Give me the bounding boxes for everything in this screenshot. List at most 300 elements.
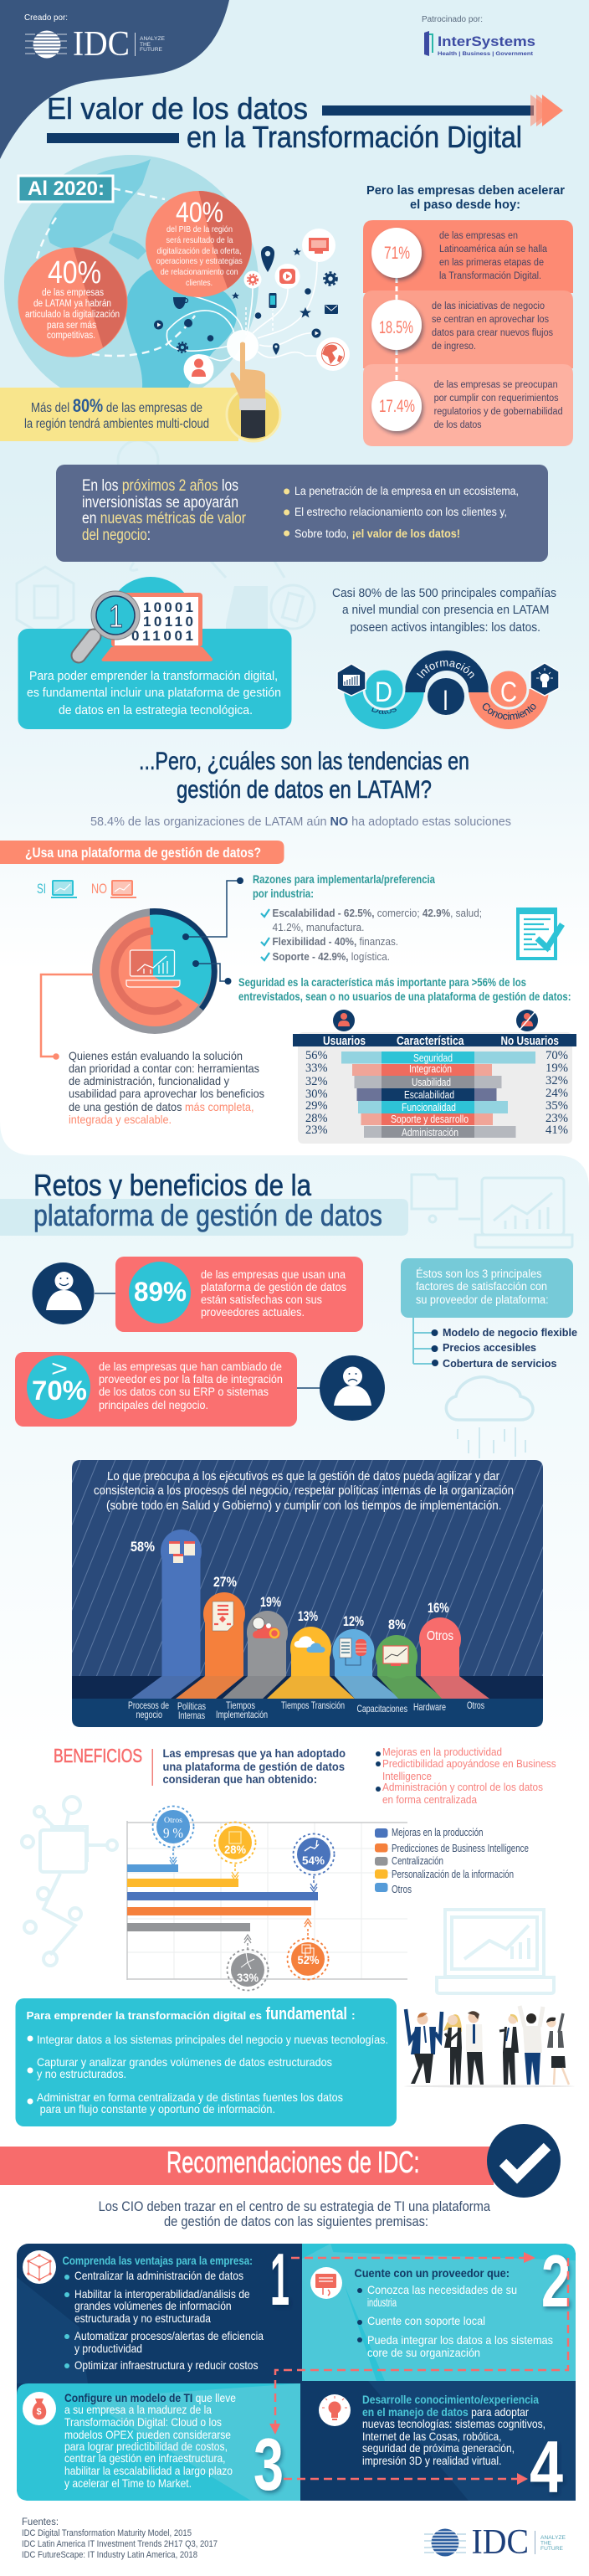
bar: transición: 13% <box>298 1608 318 1624</box>
network of icons <box>154 229 350 384</box>
text block: activos intangibles: Casi 80% de las 500 principales compañías <box>332 586 556 600</box>
callout: otros 9% <box>152 1807 194 1865</box>
quadrant 4: Desarrolle conocimiento/experiencia <box>362 2393 539 2406</box>
heading: tendencias: gestión de datos en LATAM? <box>177 776 432 804</box>
bubble: 40% LATAM: 40% <box>48 255 101 291</box>
icon: laptop with binary: 10110 <box>143 614 193 630</box>
table: características <box>293 1032 576 1144</box>
text block: quienes evalúan <box>69 1049 264 1126</box>
text block: activos intangibles: poseen activos intangibles: los datos. <box>350 620 540 635</box>
icon: check circle <box>487 2124 561 2198</box>
quadrant 3: habilitar la escalabilidad a largo plazo <box>64 2464 233 2477</box>
header blob with IDC logo: ANALYZE <box>140 37 165 42</box>
quadrant 3: y acelerar el Time to Market. <box>64 2476 192 2490</box>
quadrant 4: 4 <box>530 2425 563 2508</box>
stat: 18.5%: de ingreso. <box>432 342 476 352</box>
bar labels: Procesos de <box>128 1699 169 1711</box>
callout: otros 9%: 9 % <box>163 1825 183 1841</box>
diagram: datos información conocimiento: Datos <box>371 707 397 714</box>
panel: preocupaciones ejecutivos: Lo que preocupa a los ejecutivos es que la gestión de datos pueda agilizar y dar <box>107 1469 499 1483</box>
legend: beneficios: Centralización <box>392 1854 443 1867</box>
panel: 70%: de las empresas que han cambiado de <box>99 1360 282 1373</box>
letter C <box>489 670 528 708</box>
text block: razones: Escalabilidad - 62.5%, comercio; 42.9%, salud; <box>273 907 482 919</box>
panel: 89%: proveedores actuales. <box>201 1306 305 1319</box>
diagram: datos información conocimiento <box>336 650 560 729</box>
connector: evaluando <box>41 974 93 1060</box>
letter I <box>428 678 464 717</box>
heading: tendencias: ...Pero, ¿cuáles son las tendencias en <box>139 748 469 775</box>
arrow: step 3 to 4 <box>284 2473 528 2485</box>
text block: activos intangibles: a nivel mundial con presencia en LATAM <box>342 603 549 617</box>
heading: retos y beneficios: Retos y beneficios de la <box>33 1168 312 1202</box>
icon: magnifier: 1 <box>109 599 123 635</box>
quadrant 3: a su empresa a la madurez de la <box>64 2403 212 2416</box>
text block: seguridad <box>238 976 571 1003</box>
badge: Al 2020: Al 2020: <box>28 177 105 200</box>
panel: 89%: 89% <box>134 1277 187 1307</box>
quadrant 2: core de su organización <box>367 2346 480 2359</box>
panel: 89%: están satisfechas con sus <box>201 1293 322 1306</box>
quadrant 3 background <box>17 2383 300 2501</box>
bubble: 40% LATAM: articulado la digitalización <box>25 310 120 320</box>
row: soporte: Soporte y desarrollo <box>391 1113 469 1125</box>
stat: 18.5%: de las iniciativas de negocio <box>432 301 545 311</box>
panel: factores de satisfacción <box>401 1258 577 1370</box>
icon: money bag <box>23 2392 56 2425</box>
icon: hand touching <box>227 330 280 441</box>
panel: 70%: 70% <box>32 1375 87 1406</box>
panel: 89%: de las empresas que usan una <box>201 1268 346 1281</box>
quadrant 4: impresión 3D y realidad virtual. <box>362 2454 502 2467</box>
text block: quienes evalúan: usabilidad para aprovechar los beneficios <box>69 1087 264 1100</box>
panel: 89% <box>115 1257 363 1332</box>
callout: 52% <box>288 1919 328 1979</box>
quadrant 3: modelos OPEX pueden considerarse <box>64 2428 231 2441</box>
subheading: 58.4%: 58.4% de las organizaciones de LATAM aún NO ha adoptado estas soluciones <box>90 815 511 829</box>
text block: razones: por industria: <box>253 887 314 900</box>
icon: laptop with binary: 011001 <box>131 628 193 644</box>
quadrant 4: en el manejo de datos para adoptar <box>362 2405 529 2419</box>
row: administración: Administración <box>402 1127 458 1139</box>
bar labels <box>128 1699 484 1721</box>
row: administración: 41% <box>545 1123 568 1137</box>
panel: fundamental: : <box>351 2008 356 2022</box>
background: lower section <box>0 1122 589 1758</box>
list: beneficios: Intelligence <box>382 1770 432 1782</box>
panel: fundamental <box>15 1998 397 2126</box>
text block: quienes evalúan: de administración, funcionalidad y <box>69 1074 229 1087</box>
callout: 28% <box>214 1822 256 1880</box>
heading: acelerar el paso <box>366 183 565 212</box>
panel: 70%: > <box>51 1355 68 1381</box>
panel: fundamental: Capturar y analizar grandes volúmenes de datos estructurados <box>37 2055 332 2069</box>
panel: inversionistas: El estrecho relacionamiento con los clientes y, <box>294 505 507 518</box>
panel: factores de satisfacción: Modelo de negocio flexible <box>443 1326 577 1339</box>
bar: otros <box>419 1600 489 1699</box>
pie chart <box>92 908 218 1034</box>
bubble: 40% GDP: de relacionamiento con <box>161 267 238 277</box>
stat: 18.5%: se centran en aprovechar los <box>432 315 549 325</box>
quadrant 1: Habilitar la interoperabilidad/análisis de <box>74 2287 250 2301</box>
bar labels: Capacitaciones <box>356 1703 407 1715</box>
row: seguridad: 70% <box>545 1049 568 1062</box>
footer: IDC logo: IDC <box>472 2523 529 2562</box>
row: usabilidad: 32% <box>305 1075 328 1088</box>
heading: beneficios <box>54 1745 346 1786</box>
row: integración: 19% <box>545 1062 568 1075</box>
panel: preocupaciones ejecutivos: (sobre todo en Salud y Gobierno) y cumplir con los tiempos de implementación. <box>106 1499 502 1513</box>
person 6 <box>546 2013 569 2085</box>
icon: no usuario <box>516 1010 538 1031</box>
icon: world <box>316 337 350 371</box>
list: beneficios: Administración y control de los datos <box>382 1781 543 1793</box>
row: usabilidad: Usabilidad <box>412 1077 451 1088</box>
row: seguridad: Seguridad <box>413 1052 453 1064</box>
stat: 17.4%: de los datos <box>434 420 482 430</box>
legend: SI NO <box>37 880 136 898</box>
table: características: Característica <box>397 1034 464 1048</box>
bubble: 40% GDP: será resultado de la <box>166 235 233 245</box>
sponsor: InterSystems: InterSystems <box>438 33 535 49</box>
text block: los CIO: Los CIO deben trazar en el centro de su estrategia de TI una plataforma <box>99 2198 490 2214</box>
bubble: 40% GDP: operaciones y estrategias <box>156 256 243 266</box>
bar labels: negocio <box>136 1709 162 1720</box>
row: usabilidad <box>305 1074 568 1088</box>
panel: 70%: principales del negocio. <box>99 1399 208 1411</box>
tab: usa una plataforma <box>0 841 284 864</box>
banner: 80% multi-cloud: la región tendrá ambientes multi-cloud <box>24 417 209 431</box>
title <box>47 91 534 154</box>
panel: inversionistas: en nuevas métricas de valor <box>82 510 247 527</box>
globe illustration <box>4 155 259 409</box>
icon: bulb hexagon <box>530 663 559 696</box>
quadrant 1 <box>23 2238 289 2372</box>
quadrant 2: industria <box>367 2296 397 2309</box>
row: integración <box>305 1062 568 1076</box>
chart: beneficios <box>127 1807 407 1991</box>
panel: recomendaciones: 1 <box>270 2238 289 2321</box>
bubble: 40% LATAM: para ser más <box>47 321 96 331</box>
bubble: 40% LATAM: competitivas. <box>47 331 95 341</box>
sponsor: InterSystems: Patrocinado por: <box>422 15 483 24</box>
bar: políticas <box>176 1574 245 1699</box>
diagram: datos información conocimiento: Información <box>417 660 474 678</box>
quadrant 1: Optimizar infraestructura y reducir costos <box>74 2358 258 2372</box>
callout: 33%: 33% <box>237 1971 259 1984</box>
text block: los CIO <box>99 2198 490 2229</box>
header blob with IDC logo: Creado por: <box>24 13 68 23</box>
heading: tendencias <box>139 748 469 804</box>
footer: IDC logo: FUTURE <box>540 2547 563 2552</box>
panel: fundamental: Administrar en forma centralizada y de distintas fuentes los datos <box>37 2090 343 2104</box>
stat: 71%: Latinoamérica aún se halla <box>439 244 548 255</box>
panel: transformación digital <box>18 577 291 729</box>
panel: recomendaciones <box>17 2238 576 2508</box>
icon: bulb <box>319 2394 351 2426</box>
text block: fuentes: IDC Digital Transformation Maturity Model, 2015 <box>22 2528 192 2538</box>
quadrant 3: centrar la gestión en infraestructura, <box>64 2451 226 2465</box>
row: integración: 33% <box>305 1062 328 1075</box>
bar: procesos: 58% <box>131 1539 155 1555</box>
bubble: 40% GDP <box>146 191 252 297</box>
table: características: Usuarios <box>323 1034 366 1048</box>
text block: razones: Razones para implementarla/preferencia <box>253 872 435 886</box>
panel: fundamental: fundamental <box>266 2005 347 2023</box>
icon: usuario <box>333 1010 355 1031</box>
icon: touch screen <box>310 2267 342 2299</box>
bubble: 40% GDP: del PIB de la región <box>166 224 233 234</box>
header blob with IDC logo: FUTURE <box>140 48 162 53</box>
heading: beneficios: una plataforma de gestión de datos <box>162 1760 345 1773</box>
table: características: No Usuarios <box>500 1034 559 1048</box>
icon: monitor <box>302 229 335 262</box>
heading: acelerar el paso: el paso desde hoy: <box>410 198 520 212</box>
quadrant 4: nuevas tecnologías: sistemas cognitivos, <box>362 2417 545 2430</box>
text block: quienes evalúan: Quienes están evaluando la solución <box>69 1049 243 1062</box>
letter D <box>364 669 404 709</box>
panel: 70% <box>15 1352 297 1427</box>
text block: seguridad: Seguridad es la característica más importante para >56% de los <box>238 976 526 989</box>
icon: chart hexagon <box>337 664 366 696</box>
bar chart <box>131 1530 489 1699</box>
header blob with IDC logo <box>0 0 229 159</box>
icon: navy gear <box>325 273 336 285</box>
bar labels: Internas <box>178 1710 205 1721</box>
list: beneficios <box>376 1746 556 1806</box>
row: soporte: 23% <box>545 1112 568 1125</box>
heading: acelerar el paso: Pero las empresas deben acelerar <box>366 183 565 198</box>
bubble: 40% LATAM: de LATAM ya habrán <box>33 299 111 309</box>
arrow: step 2 to 3 <box>269 2258 568 2435</box>
stat: 17.4% <box>371 380 563 431</box>
diagram: datos información conocimiento: Conocimiento <box>482 703 536 720</box>
panel: fundamental: para un flujo constante y oportuno de información. <box>40 2102 275 2116</box>
heading: retos y beneficios <box>0 1168 408 1236</box>
quadrant 2: 2 <box>541 2239 571 2322</box>
bar: implementación: 19% <box>260 1594 281 1610</box>
text block: los CIO: de gestión de datos con las siguientes premisas: <box>164 2214 428 2229</box>
person 4 <box>499 2014 519 2085</box>
panel: fundamental: y no estructurados. <box>37 2067 126 2080</box>
faint icons: beneficios <box>22 1797 554 1993</box>
quadrant 2 <box>310 2239 571 2359</box>
footer: IDC logo: THE <box>540 2542 551 2547</box>
connector: razones <box>182 877 243 940</box>
panel: transformación digital: Para poder emprender la transformación digital, <box>29 669 278 683</box>
icon: play circle <box>274 264 300 289</box>
panel: inversionistas: del negocio: <box>82 527 151 544</box>
stat: 18.5% <box>371 300 553 352</box>
icon: magnifier <box>79 591 140 656</box>
callout: 54%: 54% <box>302 1854 325 1867</box>
row: administración: 23% <box>305 1123 328 1137</box>
quadrant 4: Internet de las Cosas, robótica, <box>362 2429 502 2443</box>
row: soporte: 28% <box>305 1112 328 1125</box>
icon: small gear <box>177 342 187 352</box>
panel: fundamental: Integrar datos a los sistemas principales del negocio y nuevas tecnologías. <box>37 2033 388 2046</box>
connector: seguridad <box>192 960 231 985</box>
person 1 <box>406 2009 442 2084</box>
callout: otros 9%: Otros <box>164 1816 183 1824</box>
panel: transformación digital: de datos en la estrategia tecnológica. <box>59 703 253 717</box>
title: en la Transformación Digital <box>187 120 522 154</box>
faint background icons <box>17 440 315 645</box>
panel: inversionistas: La penetración de la empresa en un ecosistema, <box>294 484 519 497</box>
bubble: 40% GDP: clientes. <box>186 278 213 288</box>
text block: razones: Flexibilidad - 40%, finanzas. <box>273 935 398 948</box>
letter I: I <box>443 685 448 717</box>
quadrant 3: Transformación Digital: Cloud o los <box>64 2415 222 2429</box>
text block: fuentes: Fuentes: <box>22 2516 59 2527</box>
row: funcionalidad: 35% <box>545 1099 568 1113</box>
row: administración <box>305 1123 568 1139</box>
quadrant 1: grandes volúmenes de información <box>74 2299 232 2312</box>
bar: otros: Otros <box>427 1629 453 1643</box>
icon: user <box>184 354 214 384</box>
icon: laptop with binary <box>101 593 213 661</box>
bar: otros: 16% <box>428 1600 449 1616</box>
sponsor: InterSystems <box>422 15 535 57</box>
bar labels: Tiempos Transición <box>281 1699 345 1711</box>
text block: activos intangibles <box>332 586 556 635</box>
panel: 70%: proveedor es por la falta de integración <box>99 1373 283 1386</box>
bar: políticas: 27% <box>213 1574 237 1590</box>
footer: IDC logo: ANALYZE <box>540 2536 566 2541</box>
bar labels: Otros <box>467 1699 484 1711</box>
panel: fundamental: Para emprender la transformación digital es <box>27 2009 262 2022</box>
heading: beneficios: BENEFICIOS <box>54 1745 142 1766</box>
letter D: D <box>375 676 392 708</box>
icon: phone <box>269 293 276 308</box>
quadrant 1: Comprenda las ventajas para la empresa: <box>62 2254 253 2267</box>
stat: 71%: la Transformación Digital. <box>439 271 541 281</box>
panel: 70%: de los datos con su ERP o sistemas <box>99 1386 269 1398</box>
header blob with IDC logo: IDC <box>73 25 130 64</box>
quadrant 2: Cuente con soporte local <box>367 2314 485 2327</box>
icon: map pin <box>261 246 274 272</box>
row: escalabilidad: 30% <box>305 1087 328 1101</box>
icon: small pin <box>273 343 279 355</box>
quadrant 3 <box>23 2391 284 2506</box>
bar: procesos <box>131 1530 202 1699</box>
panel: 89%: plataforma de gestión de datos <box>201 1281 346 1293</box>
quadrant 4: seguridad de próxima generación, <box>362 2441 515 2455</box>
panel: factores de satisfacción: factores de satisfacción con <box>416 1280 547 1293</box>
faint icon: cloud with binary <box>446 1377 533 1458</box>
row: seguridad <box>305 1049 568 1064</box>
row: escalabilidad <box>305 1087 568 1101</box>
heading: beneficios: Las empresas que ya han adoptado <box>162 1746 346 1760</box>
illustration: team celebrating <box>404 2006 575 2088</box>
row: funcionalidad: 29% <box>305 1099 328 1113</box>
bar labels: Hardware <box>413 1701 446 1713</box>
quadrant 3: 3 <box>254 2423 284 2506</box>
legend: SI NO: NO <box>91 881 107 897</box>
text block: razones: Soporte - 42.9%, logística. <box>273 950 390 963</box>
row: escalabilidad: Escalabilidad <box>404 1089 454 1101</box>
banner: 80% multi-cloud <box>0 388 238 441</box>
person 2 <box>443 2014 462 2085</box>
row: soporte <box>305 1112 568 1125</box>
stat: 71%: de las empresas en <box>439 231 518 241</box>
quadrant 3: para lograr predictibilidad de costos, <box>64 2440 228 2453</box>
banner: 80% multi-cloud: Más del 80% de las empresas de <box>31 395 202 416</box>
panel: preocupaciones ejecutivos: consistencia a los procesos del negocio, respetar políticas internas de la organización <box>94 1483 514 1498</box>
panel: inversionistas: En los próximos 2 años los <box>82 477 238 495</box>
list: beneficios: Predictibilidad apoyándose en Business <box>382 1757 556 1770</box>
text block: fuentes: IDC FutureScape: IT Industry Latin America, 2018 <box>22 2550 197 2560</box>
panel: three stats <box>363 220 573 446</box>
row: funcionalidad <box>305 1099 568 1113</box>
text block: quienes evalúan: integrada y escalable. <box>69 1113 172 1126</box>
bar: capacitaciones <box>333 1613 400 1699</box>
quadrant 4 <box>319 2393 563 2508</box>
icon: cube <box>23 2250 56 2284</box>
panel: preocupaciones ejecutivos <box>72 1460 543 1727</box>
quadrant 2 background <box>302 2244 576 2381</box>
legend: SI NO: SI <box>37 881 46 897</box>
panel: factores de satisfacción: Precios accesibles <box>443 1341 536 1354</box>
bubble: 40% LATAM: de las empresas <box>42 288 104 298</box>
row: escalabilidad: 24% <box>545 1087 568 1100</box>
text block: razones <box>253 872 482 963</box>
quadrant 2: Pueda integrar los datos a los sistemas <box>367 2333 553 2347</box>
icon: cup <box>173 297 187 309</box>
stat: 71%: en las primeras etapas de <box>439 258 544 268</box>
stat: 18.5%: 18.5% <box>379 318 413 337</box>
list: beneficios: en forma centralizada <box>382 1793 478 1806</box>
text block: fuentes: IDC Latin America IT Investment Trends 2H17 Q3, 2017 <box>22 2539 218 2549</box>
person 5 <box>520 2006 543 2085</box>
bar: hardware: 8% <box>388 1617 406 1632</box>
stat: 17.4%: regulatorios y de gobernabilidad <box>434 407 563 417</box>
footer: IDC logo <box>424 2523 566 2562</box>
row: seguridad: 56% <box>305 1049 328 1062</box>
stat: 71%: 71% <box>384 244 410 263</box>
icon: sad user <box>297 1355 385 1421</box>
arrow: step 1 to 2 <box>291 2252 535 2263</box>
text block: quienes evalúan: dan prioridad a contar con: herramientas <box>69 1062 259 1075</box>
header blob with IDC logo: THE <box>140 43 151 48</box>
icon: document check <box>516 908 562 960</box>
bubble: 40% LATAM <box>18 248 127 357</box>
letter C: C <box>500 676 517 708</box>
bar labels: Políticas <box>177 1700 206 1712</box>
title: El valor de los datos <box>47 91 308 126</box>
row: usabilidad: 32% <box>545 1074 568 1087</box>
list: beneficios: Mejoras en la productividad <box>382 1746 502 1758</box>
icon: happy user <box>32 1262 117 1324</box>
icon: laptop with binary: 10001 <box>143 599 193 615</box>
tab: usa una plataforma: ¿Usa una plataforma de gestión de datos? <box>25 845 261 861</box>
text block: fuentes <box>22 2516 218 2560</box>
stat: 17.4%: 17.4% <box>379 397 415 416</box>
legend: beneficios <box>375 1826 529 1895</box>
callout: 52%: 52% <box>298 1953 320 1967</box>
bar labels: Tiempos <box>226 1699 255 1711</box>
sponsor: InterSystems: Health | Business | Government <box>438 51 534 57</box>
row: integración: Integración <box>409 1063 452 1075</box>
icon: money bag: $ <box>37 2407 42 2417</box>
heading: retos y beneficios: plataforma de gestión de datos <box>33 1198 382 1232</box>
panel: factores de satisfacción: Cobertura de servicios <box>443 1357 557 1370</box>
background: upper section <box>0 0 589 1155</box>
callout: 54% <box>293 1833 335 1892</box>
arrow: title <box>530 95 563 126</box>
banner: recomendaciones: Recomendaciones de IDC: <box>166 2145 420 2179</box>
quadrant 2: Cuente con un proveedor que: <box>355 2266 510 2280</box>
